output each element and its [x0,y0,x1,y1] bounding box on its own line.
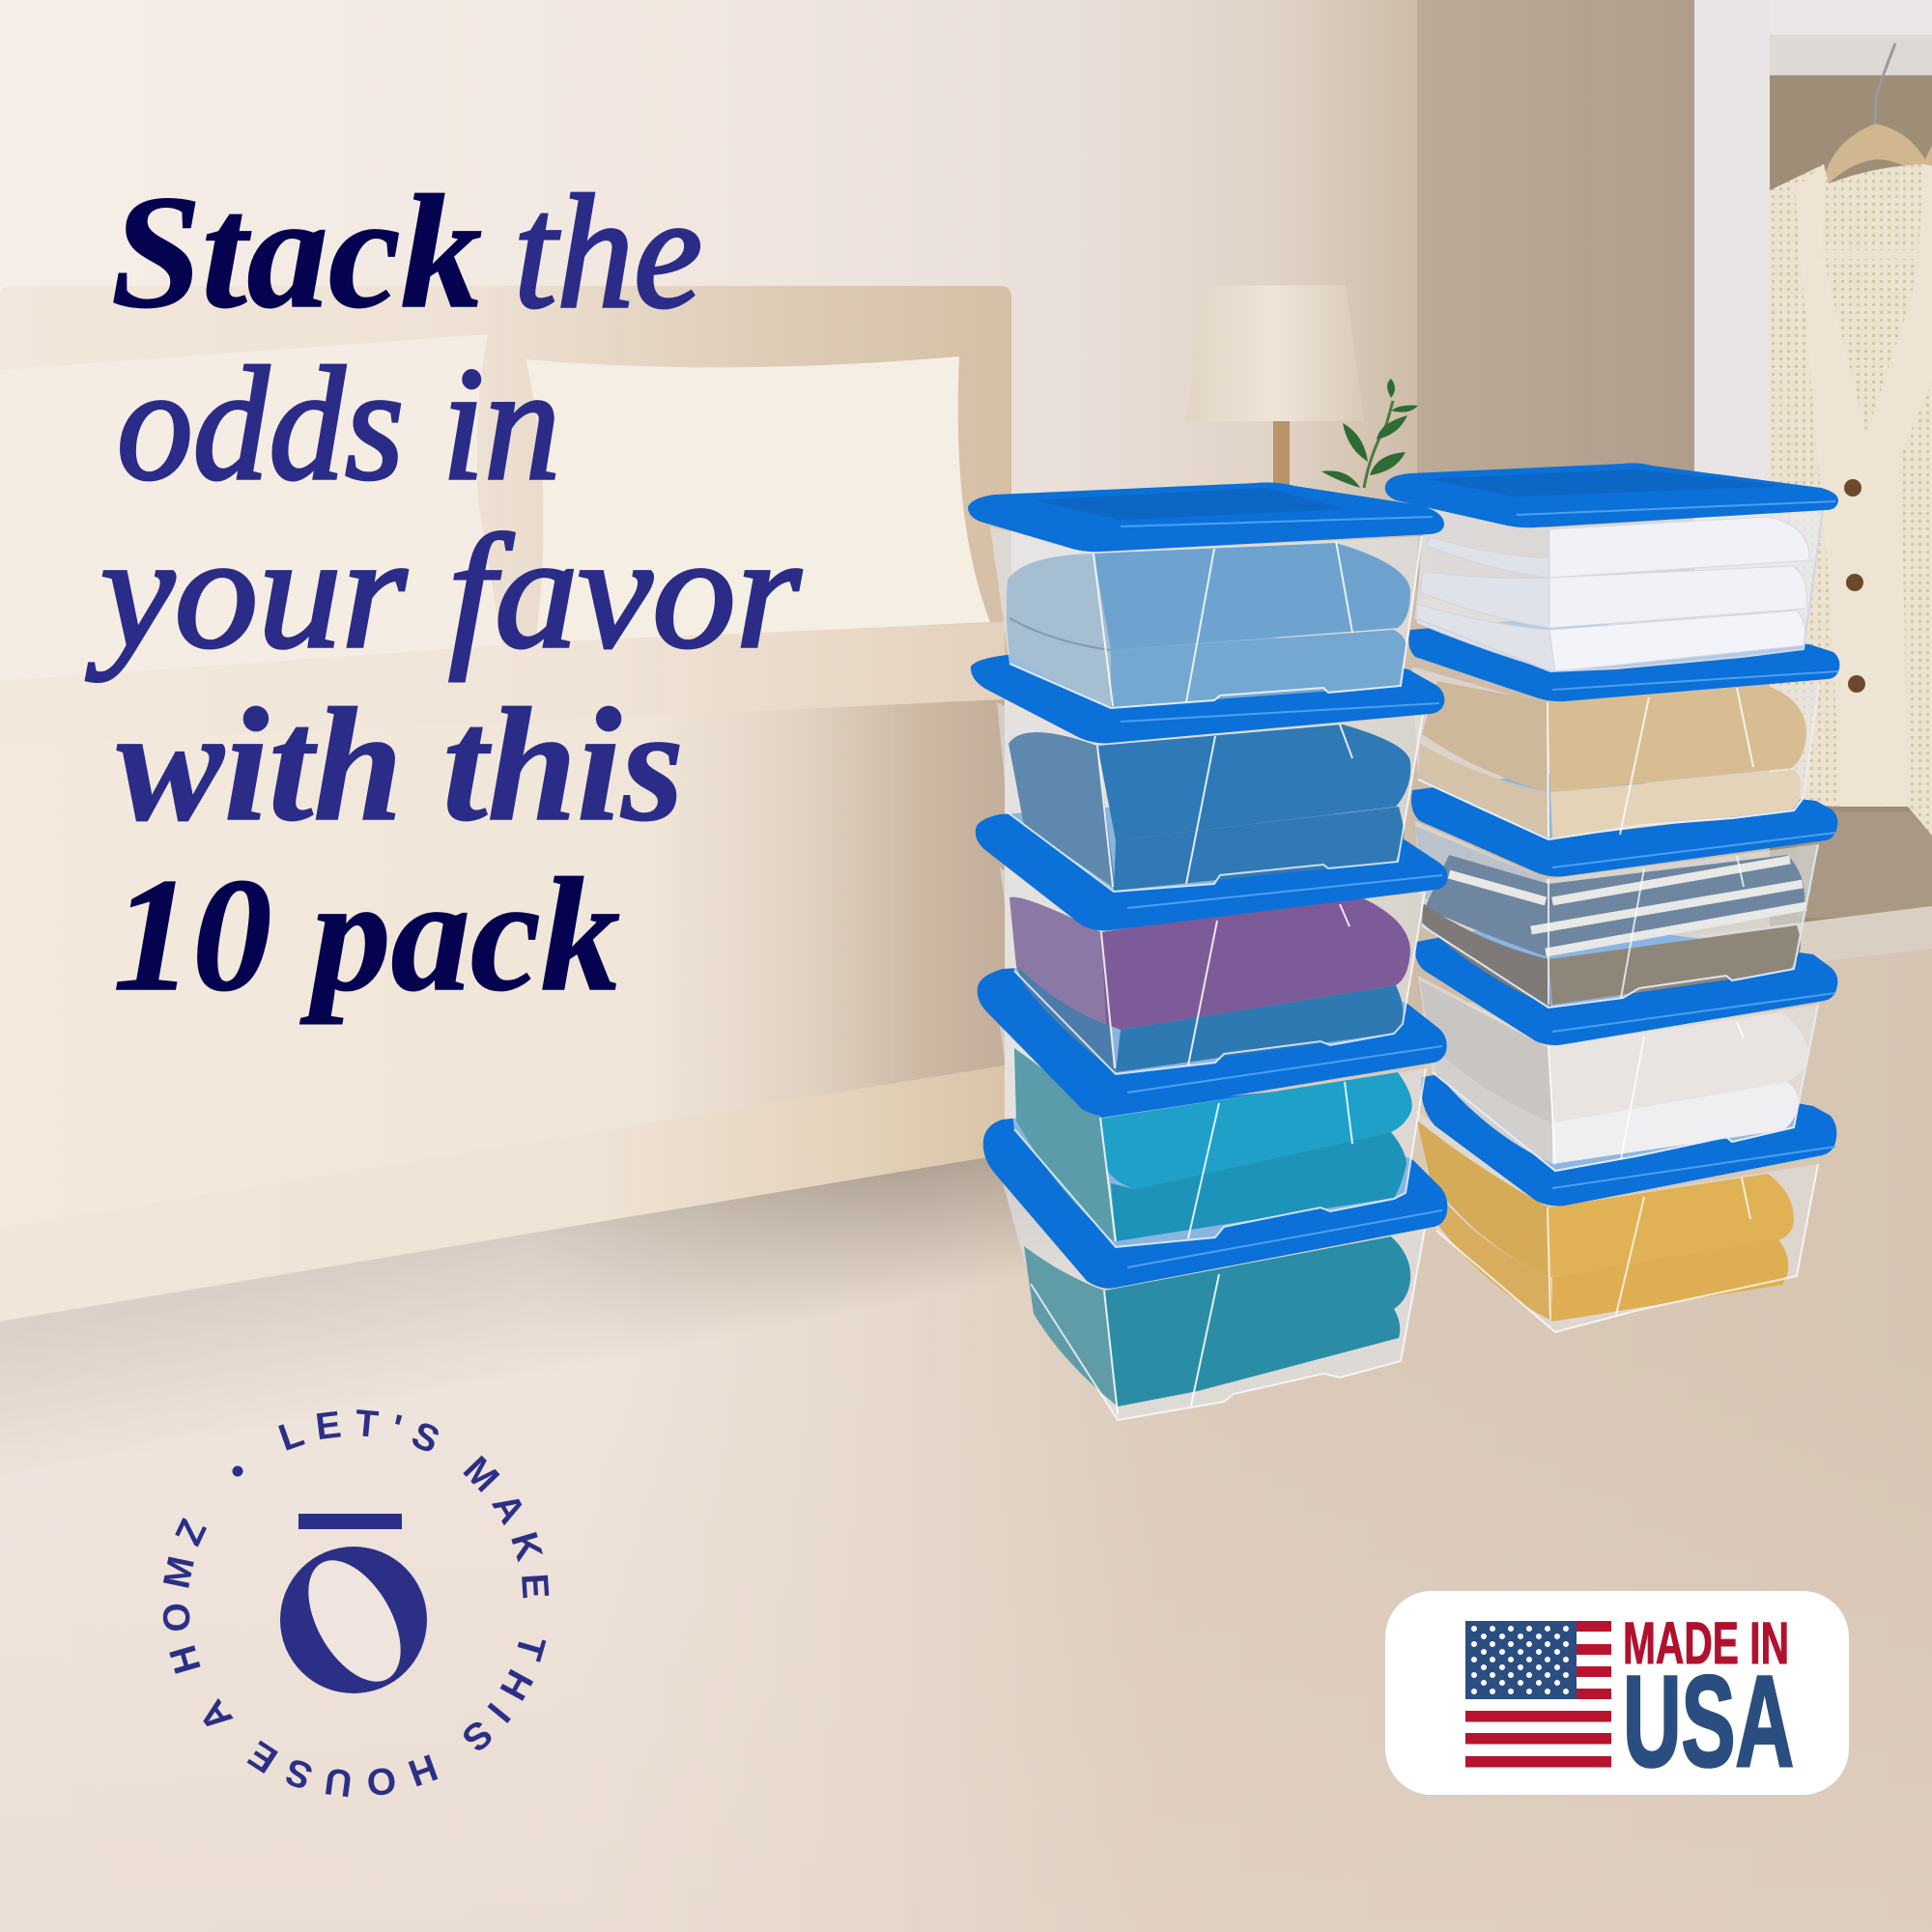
plant [1321,379,1418,488]
left front lapel [1795,164,1882,807]
bin: teal [978,952,1447,1247]
buttons [1844,479,1865,693]
made in text: MADE IN [1623,1610,1789,1676]
bin: striped [1411,773,1837,1008]
sweater body [1770,164,1932,836]
line 3: your favor [86,502,802,682]
bin: tan [1408,618,1839,839]
badge background [1385,1591,1849,1795]
badge: made in USA [1385,1591,1849,1795]
headboard [0,286,1011,692]
pillows [0,334,990,681]
bin: dark teal [983,1092,1447,1420]
line 1: Stack [111,162,482,342]
mattress side [0,699,1005,1228]
logo dot [232,1466,243,1476]
line 1: the [514,162,702,342]
bin: white 1 [1385,463,1838,671]
right lapel [1866,164,1932,807]
logo circular slogan: LET'S MAKE THIS HOUSE A HOMZ [162,1409,549,1797]
line 5: 10 pack [113,845,620,1025]
wall pillar [1417,0,1695,599]
stack: left column of storage bins [968,482,1447,1420]
line 1 [111,162,702,342]
USA text: USA [1623,1650,1794,1794]
bin: yellow [1417,1058,1836,1332]
closet interior [1700,35,1932,1001]
mattress top band [0,622,1005,746]
logo: circular brand badge [162,1409,549,1797]
bin: white 2 [1415,918,1837,1171]
closet sweater on hanger [1770,43,1932,836]
stack: right column of storage bins [1385,463,1839,1332]
flag [1465,1621,1611,1768]
carpet floor [0,949,1932,1932]
logo ring [280,1545,427,1697]
bin: purple [976,797,1447,1074]
shadow under bed [0,1157,1032,1434]
white closet trim [1694,0,1932,599]
hanger [1822,43,1932,186]
bed frame [0,1065,1005,1321]
bin: mid blue [971,638,1444,892]
line 2: odds in [117,334,560,514]
collar rib [1820,250,1915,259]
logo bar [298,1514,402,1529]
bin: light blue [968,482,1444,708]
lamp [1186,285,1364,489]
title: Stack the odds in your favor with this 10 pack [86,162,802,1025]
line 4: with this [117,675,684,855]
